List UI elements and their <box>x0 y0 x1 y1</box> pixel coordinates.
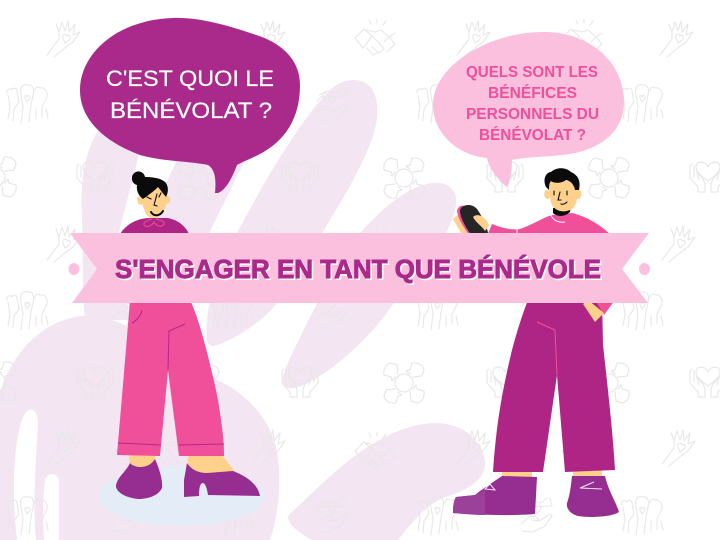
man ears <box>544 190 582 199</box>
man left shoe <box>453 476 537 515</box>
bubble shape <box>80 18 300 193</box>
woman facial details <box>151 211 163 215</box>
speech bubble: question one <box>80 18 300 193</box>
ribbon <box>70 233 649 303</box>
man figure <box>453 168 619 517</box>
man thumb <box>473 215 489 231</box>
bubble text: BÉNÉFICES <box>488 85 577 102</box>
bubble text: C'EST QUOI LE <box>106 66 274 91</box>
man neck <box>553 206 571 216</box>
ribbon dots <box>68 263 80 275</box>
title banner <box>68 233 650 303</box>
bubble text: BÉNÉVOLAT ? <box>110 98 272 123</box>
bubble text: BÉNÉVOLAT ? <box>479 127 586 144</box>
woman torso <box>119 218 190 236</box>
bubble text: PERSONNELS DU <box>466 106 599 123</box>
title shadow: S'ENGAGER EN TANT QUE BÉNÉVOLE <box>116 256 602 286</box>
woman face <box>141 184 167 218</box>
man ankles <box>502 470 602 478</box>
man trousers <box>493 300 615 472</box>
trouser seams <box>118 310 224 445</box>
woman figure <box>99 171 265 526</box>
woman collar <box>144 219 164 226</box>
woman trousers <box>117 300 224 456</box>
woman hair and bun <box>132 171 168 199</box>
woman ears <box>137 196 170 205</box>
bubble text: QUELS SONT LES <box>466 64 598 81</box>
man collar <box>551 215 565 222</box>
bubble text <box>466 64 599 144</box>
man hand back <box>453 214 472 236</box>
man hand and sleeve at pocket <box>595 300 615 315</box>
phone <box>457 206 478 236</box>
bubble shape <box>433 32 624 187</box>
ground shadow <box>99 466 265 526</box>
background leaves <box>0 80 485 540</box>
bubble text <box>106 66 274 123</box>
trouser seam <box>537 322 557 375</box>
speech bubble: question two <box>433 32 624 187</box>
man right shoe <box>567 476 619 517</box>
man shoe lace <box>485 484 495 490</box>
man hair <box>545 168 580 190</box>
man facial details <box>554 191 567 204</box>
woman left shoe <box>116 459 162 499</box>
woman right shoe <box>184 463 260 497</box>
man face <box>549 181 578 211</box>
man torso <box>487 213 612 236</box>
title: S'ENGAGER EN TANT QUE BÉNÉVOLE <box>115 255 601 284</box>
woman ankles <box>129 455 236 474</box>
man shoe lace right <box>580 482 602 489</box>
